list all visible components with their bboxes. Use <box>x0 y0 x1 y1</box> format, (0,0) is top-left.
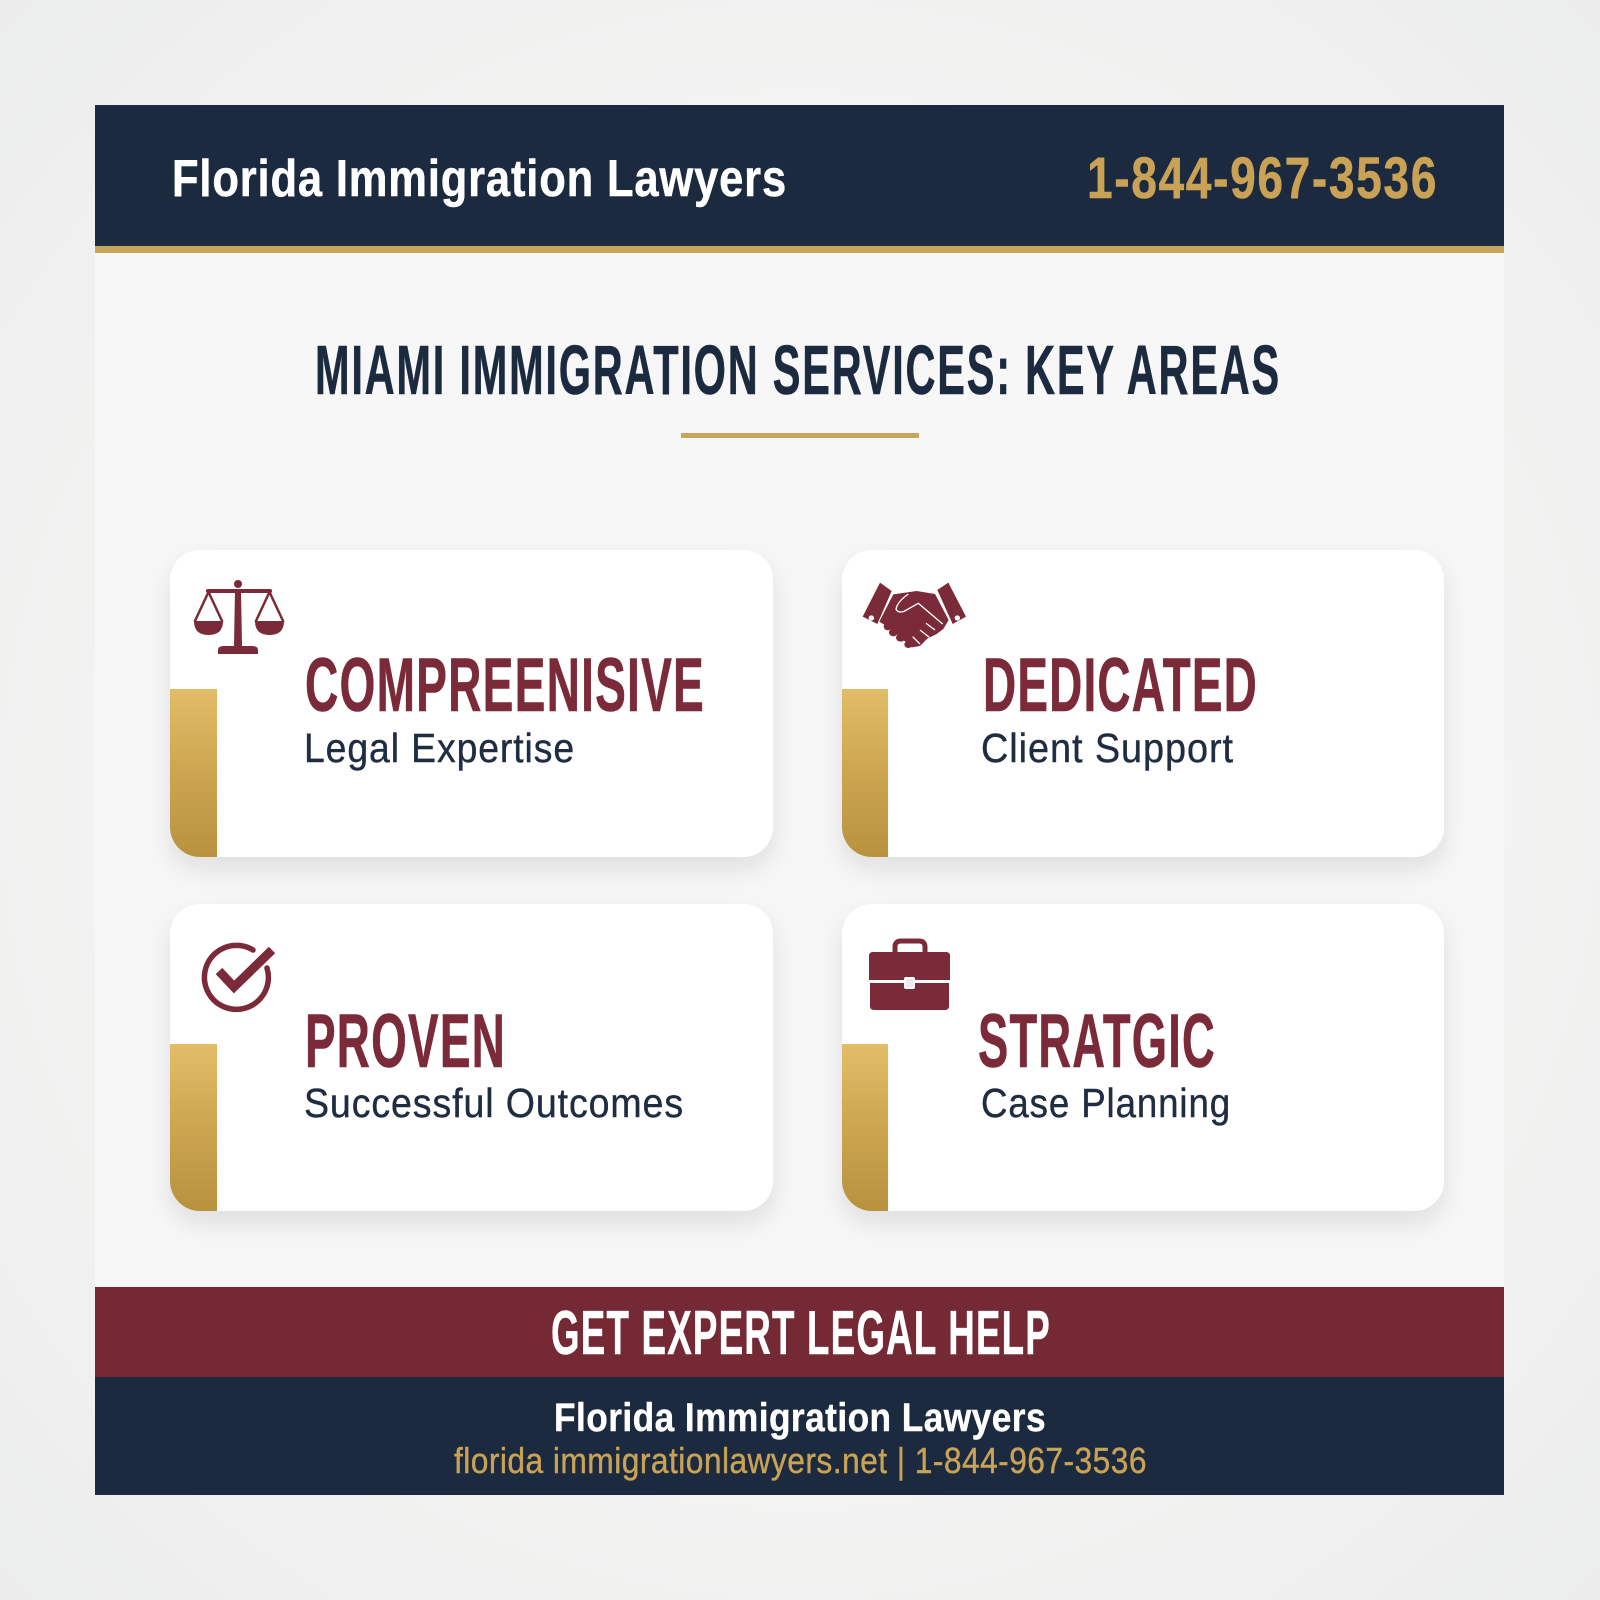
banner text: GET EXPERT LEGAL HELP <box>551 1299 1051 1368</box>
header bar <box>95 105 1504 253</box>
card subheading: Legal Expertise <box>304 725 575 771</box>
card: strategic case planning <box>842 904 1444 1211</box>
card subheading: Case Planning <box>981 1080 1231 1126</box>
infographic canvas <box>95 105 1504 1495</box>
header phone number: 1-844-967-3536 <box>1087 146 1438 211</box>
card subheading: Client Support <box>981 725 1234 771</box>
card: comprehensive legal expertise <box>170 550 773 857</box>
icon: scales of justice <box>194 580 284 654</box>
icon: briefcase <box>869 941 950 1010</box>
header firm name: Florida Immigration Lawyers <box>172 150 787 208</box>
card subheading: Successful Outcomes <box>304 1080 684 1126</box>
footer firm name: Florida Immigration Lawyers <box>554 1396 1046 1440</box>
card: dedicated client support <box>842 550 1444 857</box>
main panel <box>95 105 1504 1495</box>
icon: handshake <box>863 583 966 648</box>
footer <box>95 1377 1504 1495</box>
card: proven successful outcomes <box>170 904 773 1211</box>
footer contact line: florida immigrationlawyers.net | 1-844-967-3536 <box>454 1440 1147 1481</box>
card heading: DEDICATED <box>983 643 1258 728</box>
card heading: STRATGIC <box>978 999 1216 1084</box>
title underline <box>681 433 919 438</box>
call-to-action banner <box>95 1287 1504 1377</box>
card heading: COMPREENISIVE <box>305 643 705 728</box>
card heading: PROVEN <box>305 999 506 1084</box>
icon: check mark in circle <box>204 945 272 1009</box>
